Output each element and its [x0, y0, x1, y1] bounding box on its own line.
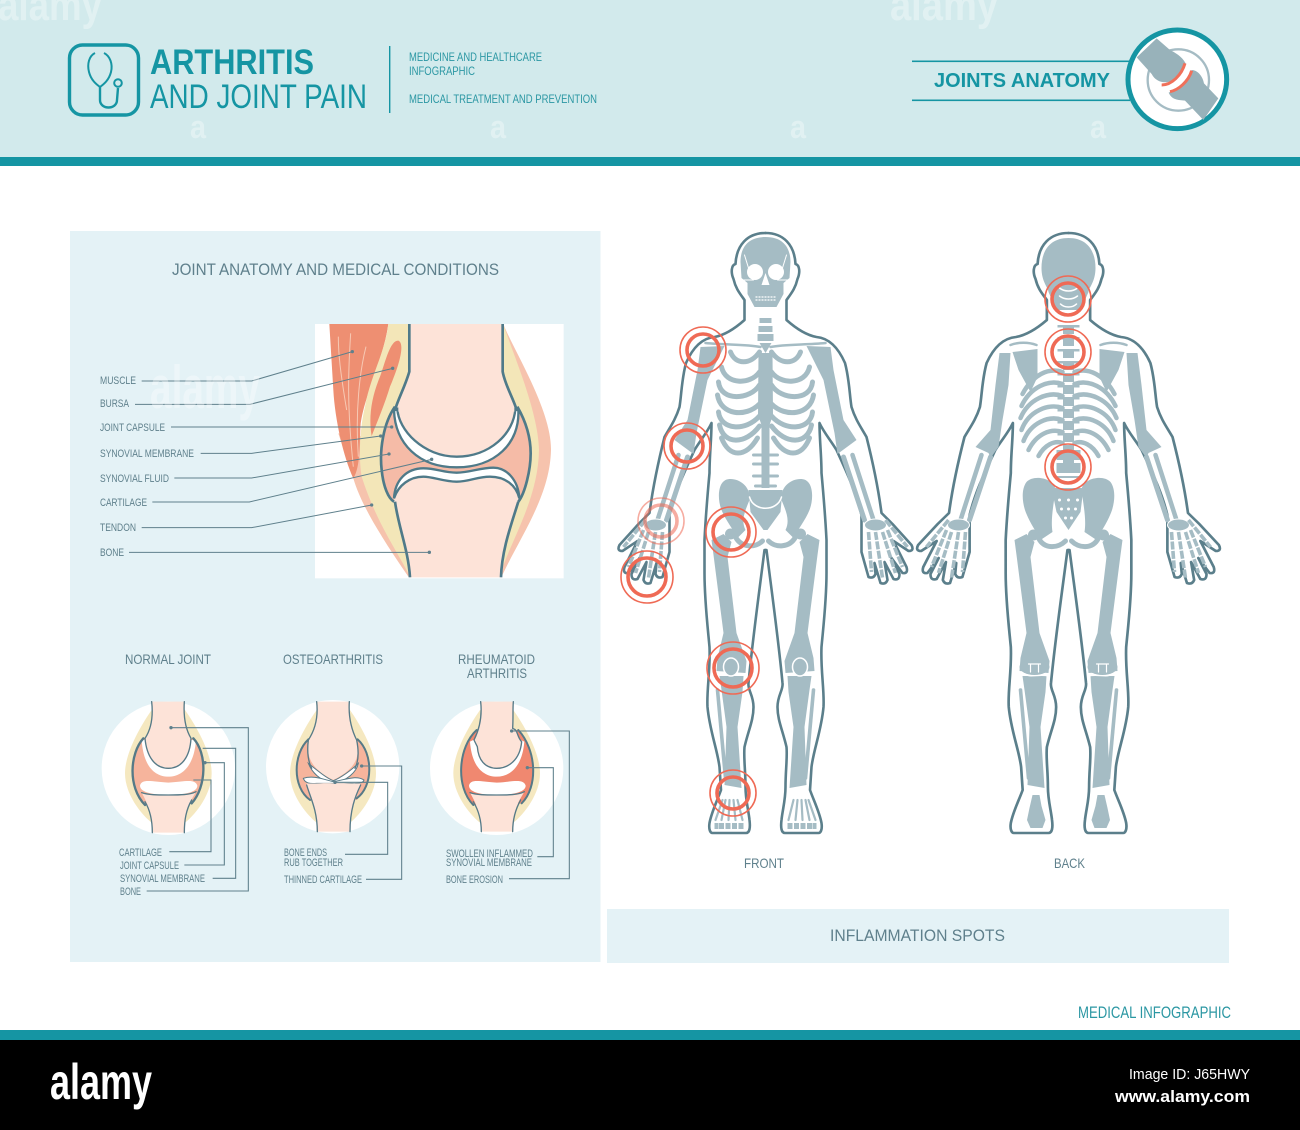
condition labels: BONE ENDS [284, 847, 327, 859]
header band: a [190, 109, 206, 145]
diagram: osteoarthritis [266, 700, 402, 879]
subtitle text: INFOGRAPHIC [409, 64, 475, 78]
joint part labels: BURSA [100, 398, 130, 410]
header band [0, 0, 1300, 166]
condition labels [119, 847, 533, 898]
panel: inflammation spots [607, 909, 1229, 963]
icon: joint badge [1128, 30, 1227, 129]
condition headings: OSTEOARTHRITIS [283, 651, 383, 667]
footer credit: MEDICAL INFOGRAPHIC [1078, 1003, 1231, 1022]
stock image details [1114, 1066, 1250, 1106]
figure captions: BACK [1054, 855, 1086, 871]
spine [1060, 288, 1078, 478]
half skeleton, both sides [624, 343, 908, 829]
joints anatomy heading: JOINTS ANATOMY [934, 70, 1111, 92]
skull back [1042, 238, 1096, 310]
header band: a [490, 109, 506, 145]
joint part labels: BONE [100, 547, 124, 559]
joint part labels: JOINT CAPSULE [100, 422, 165, 434]
condition labels: JOINT CAPSULE [120, 860, 179, 872]
title: AND JOINT PAIN [150, 78, 367, 116]
stock image details: Image ID: J65HWY [1129, 1066, 1250, 1083]
panel heading: JOINT ANATOMY AND MEDICAL CONDITIONS [172, 260, 499, 279]
condition headings: RHEUMATOID [458, 651, 535, 667]
sternum and spine [754, 353, 778, 488]
leader lines [129, 350, 433, 554]
condition headings [125, 651, 535, 681]
leader lines [509, 729, 569, 879]
body outline [917, 233, 1220, 833]
joint part labels: MUSCLE [100, 375, 136, 387]
diagram: normal joint [102, 702, 248, 891]
condition labels: BONE [120, 886, 141, 898]
title: ARTHRITIS [150, 43, 314, 82]
leader lines [333, 764, 402, 879]
panel: joint anatomy and medical conditions [70, 231, 600, 962]
figure: back skeleton [917, 233, 1220, 833]
condition labels: SYNOVIAL MEMBRANE [120, 873, 205, 885]
icon: stethoscope badge [70, 45, 138, 115]
header band: a [790, 109, 806, 145]
figure captions [744, 855, 1086, 871]
condition headings: NORMAL JOINT [125, 651, 211, 667]
condition labels: RUB TOGETHER [284, 857, 343, 869]
joint anatomy diagram [129, 324, 564, 578]
subtitle text [409, 50, 597, 106]
footer bar [0, 1030, 1300, 1130]
joint part labels: SYNOVIAL MEMBRANE [100, 448, 194, 460]
diagram: rheumatoid arthritis [430, 702, 569, 879]
half skeleton, both sides [926, 343, 1210, 828]
inflammation spots: back [1045, 276, 1091, 490]
condition labels: BONE EROSION [446, 874, 503, 886]
figure captions: FRONT [744, 855, 784, 871]
header divider [389, 46, 390, 113]
neck vertebrae [758, 318, 774, 353]
skull [740, 237, 790, 307]
joint part labels [100, 375, 194, 559]
leader lines [147, 726, 248, 891]
joint part labels: CARTILAGE [100, 497, 147, 509]
condition headings: ARTHRITIS [467, 665, 527, 681]
condition labels: THINNED CARTILAGE [284, 874, 362, 886]
subtitle text: MEDICINE AND HEALTHCARE [409, 50, 542, 64]
stock image details: www.alamy.com [1114, 1087, 1250, 1106]
header band: a [1090, 109, 1106, 145]
figure: front skeleton [618, 233, 912, 833]
panel: inflammation spots: INFLAMMATION SPOTS [830, 926, 1005, 945]
inflammation spots: front [621, 327, 759, 816]
condition labels: SWOLLEN INFLAMMED [446, 848, 533, 860]
subtitle text: MEDICAL TREATMENT AND PREVENTION [409, 92, 597, 106]
joint part labels: SYNOVIAL FLUID [100, 473, 169, 485]
body outline [618, 233, 912, 833]
title [150, 43, 367, 116]
stock logo: alamy [50, 1054, 152, 1110]
joint part labels: TENDON [100, 522, 136, 534]
panel: joint anatomy and medical conditions: alamy [150, 354, 260, 421]
condition labels: CARTILAGE [119, 847, 162, 859]
condition labels: SYNOVIAL MEMBRANE [446, 857, 532, 869]
